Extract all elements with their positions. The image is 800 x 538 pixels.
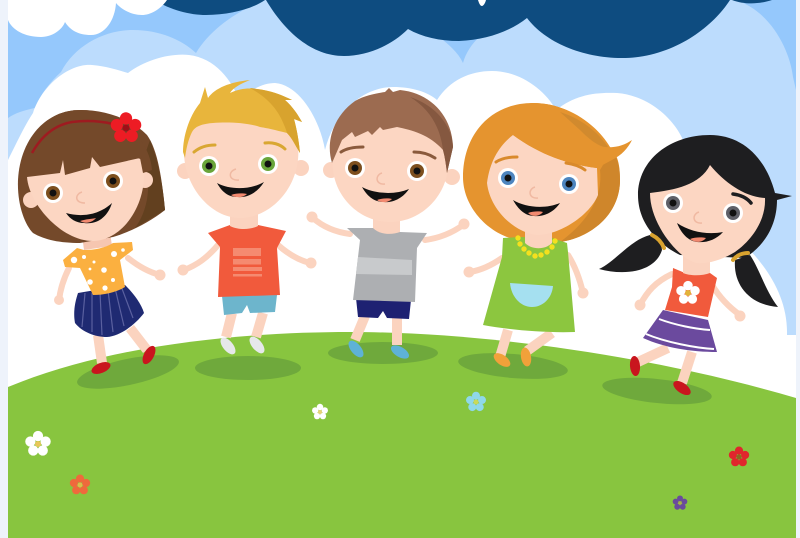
light blue background clouds — [8, 0, 796, 335]
blouse — [63, 242, 133, 295]
child 1: girl with brown hair — [18, 110, 166, 376]
sky — [8, 0, 796, 118]
hair ties — [652, 235, 748, 260]
child 4: girl with orange hair and green dress — [463, 103, 632, 370]
shorts — [356, 298, 411, 319]
legs — [638, 348, 692, 383]
white foreground clouds — [8, 55, 796, 420]
sky gap between clouds — [443, 39, 477, 63]
ears — [177, 163, 193, 179]
pigtails — [599, 235, 778, 307]
flower: white left — [25, 431, 51, 456]
dress — [483, 237, 575, 332]
ears — [323, 162, 339, 178]
eyebrows — [194, 143, 285, 152]
shirt stripe — [356, 257, 412, 275]
eyebrows — [341, 147, 435, 158]
arms — [59, 258, 160, 301]
pocket — [510, 283, 553, 307]
ground shadows — [74, 342, 713, 409]
nose — [377, 173, 385, 184]
shoes — [92, 362, 110, 374]
legs — [98, 328, 147, 363]
hair — [183, 80, 302, 158]
shirt — [208, 225, 286, 297]
flower: light blue — [466, 392, 486, 411]
shoes — [346, 338, 366, 360]
shoes — [629, 356, 641, 376]
fringe — [20, 110, 152, 180]
eyes — [345, 158, 365, 178]
legs — [226, 313, 263, 337]
face — [27, 157, 143, 241]
necklace — [515, 235, 558, 259]
flower: orange — [70, 474, 90, 494]
arms — [470, 255, 583, 293]
neck — [525, 230, 552, 248]
arms — [313, 218, 463, 240]
eyes — [43, 183, 63, 203]
shoes — [491, 350, 513, 370]
face — [650, 165, 765, 263]
white cloud top left — [8, 0, 167, 37]
face — [333, 115, 448, 222]
neck — [373, 215, 400, 234]
nose — [230, 169, 239, 180]
hair — [638, 135, 792, 258]
shirt print — [233, 248, 262, 276]
shirt flower — [676, 281, 700, 304]
eyes — [199, 156, 219, 176]
white drop in cloud — [478, 0, 486, 6]
legs — [355, 316, 397, 345]
hair front with flick — [512, 103, 632, 168]
neck — [83, 238, 112, 250]
neck — [230, 214, 258, 229]
neck — [683, 255, 710, 275]
skirt — [643, 310, 717, 352]
flower: white right — [312, 404, 328, 419]
mouth — [362, 187, 409, 202]
shoes — [220, 338, 236, 354]
face — [487, 135, 598, 235]
eyes — [498, 168, 518, 188]
arms — [640, 274, 740, 315]
shirt — [665, 268, 717, 317]
flower hair clip — [111, 112, 141, 142]
child 3: boy with brown hair — [306, 88, 470, 361]
hair back — [18, 110, 165, 243]
eyes — [663, 193, 683, 213]
mouth — [66, 203, 112, 223]
flower: red — [729, 446, 749, 466]
skirt — [74, 285, 144, 337]
arms — [184, 245, 310, 270]
mouth — [217, 182, 264, 197]
mouth — [513, 200, 560, 216]
dark blue storm cloud — [155, 0, 772, 58]
headband — [32, 121, 113, 153]
eyebrow — [733, 194, 751, 203]
green hill — [8, 332, 796, 538]
nose — [694, 212, 702, 223]
child 5: girl with black pigtails — [599, 135, 792, 398]
eyebrows — [496, 157, 585, 170]
hair back — [463, 103, 620, 242]
nose — [77, 192, 85, 203]
face — [184, 115, 298, 218]
ears — [23, 192, 39, 208]
flower: purple — [673, 495, 687, 510]
legs — [500, 330, 552, 357]
child 2: blond boy — [177, 80, 316, 357]
mouth — [677, 223, 723, 242]
shirt — [347, 228, 427, 302]
nose — [530, 187, 538, 198]
hair — [330, 88, 453, 173]
shorts — [222, 295, 277, 315]
